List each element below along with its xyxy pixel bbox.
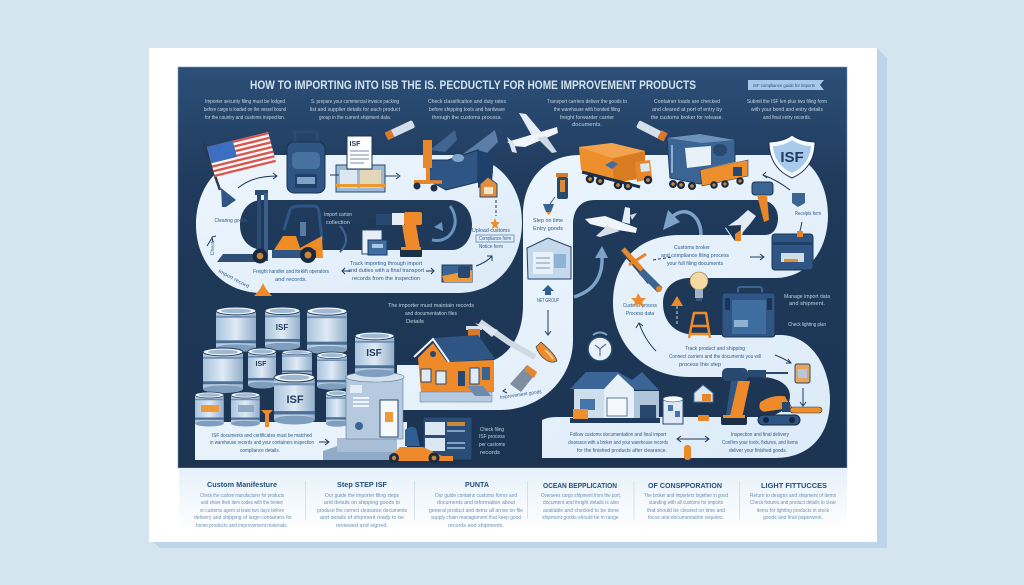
lower right text: Follow customs documentation and final import xyxy=(570,432,667,438)
barrels group: ISF xyxy=(276,323,288,332)
icon: orange truck xyxy=(579,143,652,190)
footer column: custom manufacture: delivery and shipping of large containers for xyxy=(194,515,292,521)
ribbon tag xyxy=(748,80,824,90)
lower right labels: process this step xyxy=(679,362,721,368)
footer column: ocean application: OCEAN BEPPLICATION xyxy=(543,481,617,490)
icon: document house xyxy=(527,238,571,279)
footer column: step: reviewed and signed. xyxy=(336,523,388,529)
footer column: ocean application: shipment goods should be in range. xyxy=(542,515,620,521)
footer column: cooperation: The broker and importers together in good xyxy=(644,493,728,499)
top-right labels: Manage import data xyxy=(784,294,830,300)
funnel xyxy=(261,410,273,427)
left inner labels: and records. xyxy=(275,277,307,283)
top text blocks: with your bond and entry details xyxy=(751,107,823,113)
icon: card xyxy=(442,265,472,282)
lower right labels: Connect carriers and the documents you will xyxy=(669,354,761,360)
top text blocks: and final entry records. xyxy=(763,115,811,121)
left inner labels: Check xyxy=(210,240,216,256)
lower left text: ISF documents and certificates must be matched xyxy=(212,433,312,439)
title: HOW TO IMPORTING INTO ISB THE IS. PECDUCTLY FOR HOME IMPROVEMENT PRODUCTS xyxy=(250,80,696,92)
main dark panel xyxy=(178,67,847,468)
forklift xyxy=(217,190,323,264)
top text blocks: and cleared at port of entry by xyxy=(652,107,723,113)
left inner labels: records from the inspection xyxy=(352,276,420,282)
icon: jar xyxy=(795,364,810,383)
footer column: cooperation: standing with all customs for imports xyxy=(649,500,723,506)
top text blocks: Submit the ISF ten plus two filing form xyxy=(747,99,827,105)
drill xyxy=(368,212,422,257)
barrels group: ISF xyxy=(286,394,304,406)
icon: small house marker xyxy=(480,177,497,197)
icon: star marker xyxy=(490,218,500,229)
icon: customs machine xyxy=(414,130,498,192)
top-right labels: and compliance filing process xyxy=(661,253,730,259)
lower right labels xyxy=(669,346,761,368)
icon: plane xyxy=(507,113,558,153)
top text blocks: freight forwarder carrier xyxy=(560,115,614,121)
footer column: step: produce the correct clearance documents xyxy=(317,508,407,514)
left winding path xyxy=(196,155,522,293)
left inner labels: Upload customs xyxy=(472,228,511,234)
curved arrow xyxy=(432,206,455,240)
icon: cup xyxy=(510,365,537,392)
footer column: punta: Our guide contains customs forms and xyxy=(435,493,517,499)
lower left text: compliance details. xyxy=(240,448,280,454)
papers xyxy=(362,230,387,255)
lower right labels: Track product and shipping xyxy=(685,346,745,352)
icon: blue house xyxy=(570,372,660,423)
shelf side text xyxy=(479,427,505,456)
curved up arrow xyxy=(574,246,608,297)
top text blocks: through the customs process. xyxy=(432,115,502,121)
icon: ladder xyxy=(689,313,710,338)
icon: chainsaw xyxy=(758,396,822,425)
vertical dash arrow xyxy=(545,310,551,335)
left inner labels: and duties with a final transport xyxy=(348,268,425,274)
footer column: ocean application: available and checked to be done xyxy=(543,508,619,514)
decorative arc xyxy=(340,226,346,252)
label: improvement: Improvement goods xyxy=(500,389,543,401)
footer column: custom manufacture: or customs agent at least two days before xyxy=(200,508,284,514)
orange house xyxy=(414,326,495,402)
icon: orange block xyxy=(698,415,709,421)
footer divider xyxy=(306,481,740,519)
shelf side text: ISF process xyxy=(479,434,505,440)
footer column: punta: PUNTA xyxy=(465,480,490,489)
footer column: step: and details on shipping goods to xyxy=(324,500,400,506)
icon: orange arrow xyxy=(671,296,683,326)
card xyxy=(149,48,877,542)
footer column: step: and details of shipment ready to be xyxy=(320,515,404,521)
top-right labels: Step on time xyxy=(533,218,563,224)
left inner labels: Clearing goods xyxy=(214,218,248,224)
left inner labels: Notice form xyxy=(479,244,503,250)
icon: bulb xyxy=(690,272,708,301)
footer column: punta: general product and items all arrive on file xyxy=(429,508,523,514)
shelves xyxy=(423,417,472,460)
footer strip xyxy=(179,468,847,530)
left inner labels: Compliance form xyxy=(479,236,511,242)
top text blocks: S. prepare your commercial invoice packing xyxy=(311,99,399,105)
tag and arrow xyxy=(763,172,805,231)
icon: plane 2 xyxy=(585,207,637,237)
orange forklift xyxy=(389,427,453,464)
arrow: dashed xyxy=(653,257,672,260)
footer column: light fixtures: items for lighting products in stock xyxy=(757,508,829,514)
lower right text: clearance with a broker and your warehouse records xyxy=(568,440,668,446)
icon: wrench xyxy=(623,249,662,307)
small icons: canister and funnel xyxy=(543,173,568,215)
top-right labels: Receipts form xyxy=(795,211,821,217)
right winding path xyxy=(397,155,830,458)
tower with ISF drum xyxy=(323,332,404,460)
footer column: cooperation: focus and documentation requires. xyxy=(648,515,724,521)
tower with ISF drum: ISF xyxy=(366,348,382,359)
icon: ISF document and box xyxy=(336,136,385,192)
top text blocks: Container loads are checked xyxy=(654,99,720,105)
icon: ISF shield: ISF xyxy=(780,149,804,166)
top text blocks: for the country and customs inspection. xyxy=(205,115,285,121)
top-right labels: your full filing documents xyxy=(667,261,724,267)
lower right text: for the finished products after clearance. xyxy=(577,448,667,454)
footer column: custom manufacture: home products and improvement materials. xyxy=(196,523,288,529)
top text blocks: before cargo is loaded on the vessel bound xyxy=(204,107,286,113)
left inner labels: Freight handler and forklift operators xyxy=(253,269,329,275)
shelf side text: records xyxy=(480,450,501,456)
top text blocks xyxy=(204,99,827,128)
arrow xyxy=(503,389,507,393)
footer column: punta xyxy=(429,480,523,529)
footer column: light fixtures: Check fixtures and product details to clear xyxy=(750,500,836,506)
mid note text: Details xyxy=(406,319,425,325)
footer column: cooperation: that should be cleared on time and xyxy=(647,508,725,514)
icon: tiny house xyxy=(694,385,713,402)
icon: trowel xyxy=(475,322,557,362)
left inner labels: collection xyxy=(326,220,350,226)
footer column: punta: documents and information about xyxy=(437,500,516,506)
lower left path block xyxy=(195,422,407,460)
shelf side text: Check filing xyxy=(480,427,504,433)
top-right labels: Entry goods xyxy=(533,226,564,232)
mid note text: The importer must maintain records xyxy=(388,303,475,309)
footer column: punta: records and shipments. xyxy=(448,523,504,529)
icon: backpack xyxy=(287,132,325,193)
left inner labels: Track importing through import xyxy=(350,261,423,267)
top-right labels: and shipment. xyxy=(789,301,825,307)
top text blocks: the customs broker for release. xyxy=(651,115,723,121)
icon: case xyxy=(722,287,775,337)
footer column: ocean application: document and freight details is also xyxy=(543,500,619,506)
icon: ISF document and box: ISF xyxy=(350,141,361,148)
lower right text xyxy=(568,432,798,454)
footer column: custom manufacture xyxy=(194,480,292,529)
curved arrow 2 xyxy=(663,210,701,235)
footer column: step: Step STEP ISF xyxy=(337,480,387,489)
card shadow xyxy=(153,48,887,548)
lower right text: Confirm your tools, fixtures, and items xyxy=(722,440,798,446)
top-right labels: Process data xyxy=(626,311,654,317)
left inner labels xyxy=(210,212,514,290)
top text blocks: before shipping tools and hardware xyxy=(429,107,505,113)
shelf side text: per customs xyxy=(479,442,505,448)
mid note text: and documentation files xyxy=(405,311,457,317)
top text blocks: group in the current shipment data. xyxy=(319,115,391,121)
top-right labels: Customs broker xyxy=(674,245,710,251)
lower right text: deliver your finished goods. xyxy=(729,448,787,454)
icon: tool top right xyxy=(636,119,668,141)
top-right labels: Customs process xyxy=(623,303,657,309)
arrow: toolbox xyxy=(750,254,764,260)
icon: drill 2 xyxy=(721,368,788,425)
icon: orange star xyxy=(254,283,272,296)
lower right text: Inspection and final delivery xyxy=(731,432,789,438)
footer column: cooperation: OF CONSPPORATION xyxy=(648,481,722,490)
top text blocks: Importer security filing must be lodged xyxy=(205,99,285,105)
footer column: ocean application xyxy=(541,481,621,521)
icon: ISF shield xyxy=(769,135,815,178)
footer column: custom manufacture: and share their item codes with the broker xyxy=(201,500,283,506)
ribbon tag: ISF compliance guide for imports xyxy=(753,83,816,88)
icon: container and small truck xyxy=(667,134,748,190)
footer column: light fixtures xyxy=(750,481,836,521)
icon: toolbox xyxy=(772,231,813,270)
barrels group: ISF xyxy=(256,361,267,368)
arrows: left loop xyxy=(207,170,496,274)
icon: US flag xyxy=(203,132,276,190)
footer column: step xyxy=(317,480,407,529)
icon: triangle marker xyxy=(221,188,236,207)
top text blocks: the warehouse with bonded filing xyxy=(554,107,620,113)
lower left text: in warehouse records and your containers inspection xyxy=(210,440,314,446)
icon: scanner and brush xyxy=(725,182,773,242)
icon: small tool top xyxy=(385,120,415,140)
top text blocks: list and supplier details for each product xyxy=(310,107,401,113)
top-right labels: Check lighting plan xyxy=(788,322,826,328)
left inner labels: Import carton xyxy=(324,212,352,218)
footer column: light fixtures: Return to designs and shipment of items xyxy=(750,493,836,499)
top text blocks: Transport carriers deliver the goods to xyxy=(547,99,627,105)
footer column: cooperation xyxy=(644,481,728,521)
footer column: custom manufacture: Check the custom manufacturer for products xyxy=(200,493,284,499)
footer column: ocean application: Oversees cargo shipment from the port, xyxy=(541,493,621,499)
icon: small home arrow xyxy=(542,285,554,295)
footer column: punta: supply chain management that keep good xyxy=(431,515,521,521)
icon: paint can xyxy=(663,396,683,424)
top-right labels xyxy=(533,211,830,328)
mid note text xyxy=(388,303,475,325)
lower left text xyxy=(210,433,314,454)
top text blocks: documents. xyxy=(572,122,602,128)
left inner labels: Import record xyxy=(217,268,250,290)
footer column: light fixtures: LIGHT FITTUCCES xyxy=(761,481,827,490)
footer column: light fixtures: goods and final paperwork. xyxy=(763,515,823,521)
footer column: custom manufacture: Custom Manifesture xyxy=(207,480,277,489)
top text blocks: Check classification and duty rates xyxy=(428,99,507,105)
arrows: curve xyxy=(636,323,806,406)
icon: clock xyxy=(588,332,612,361)
barrels group xyxy=(195,307,348,427)
arrow xyxy=(319,439,329,445)
double arrow and capsule xyxy=(677,436,709,460)
footer column: step: Our guide the importer filing steps xyxy=(325,493,399,499)
top-right labels: NET GROUP xyxy=(537,298,559,304)
